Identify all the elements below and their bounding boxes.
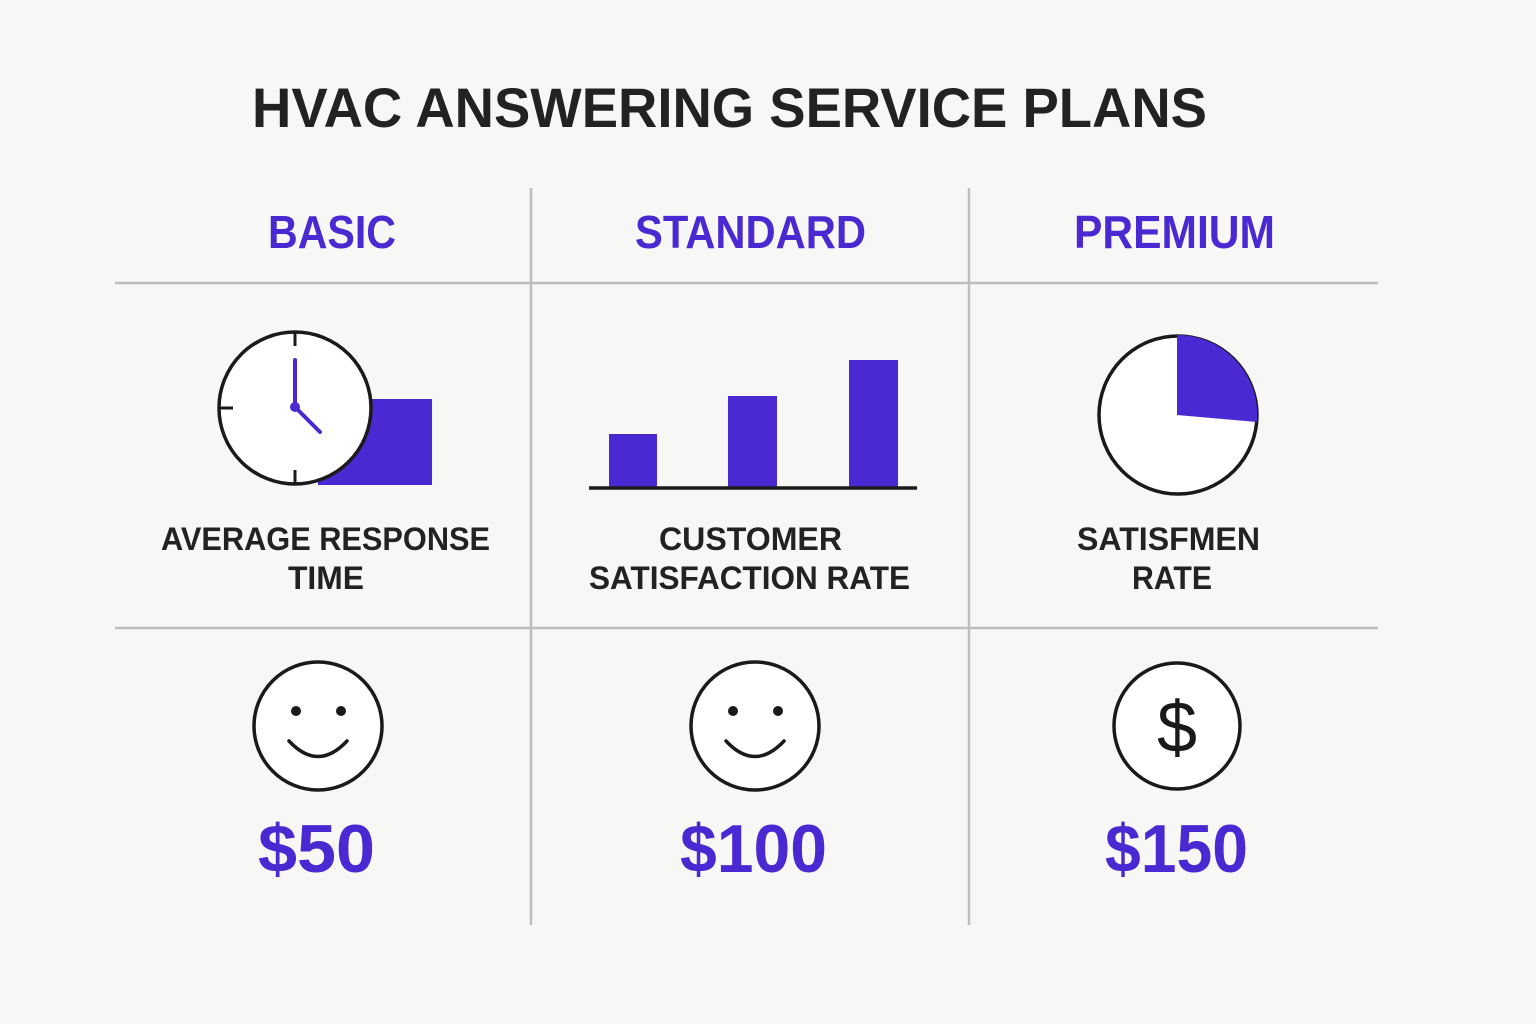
icon: smiley standard [691, 662, 819, 790]
label: customer satisfaction rate: SATISFACTION RATE [589, 560, 910, 596]
icon: pie chart [1099, 335, 1257, 494]
label: average response time: TIME [288, 560, 364, 596]
icon: smiley basic [254, 662, 382, 790]
label: satisfmen rate: SATISFMEN [1077, 521, 1260, 557]
price: $100: $100 [680, 811, 827, 887]
label: satisfmen rate: RATE [1132, 560, 1212, 596]
label: customer satisfaction rate [589, 521, 910, 596]
icon: dollar coin: $ [1157, 688, 1197, 768]
label: average response time: AVERAGE RESPONSE [161, 521, 490, 557]
icon: dollar coin [1114, 663, 1240, 789]
header: standard: STANDARD [635, 206, 866, 258]
price: $50: $50 [258, 811, 375, 887]
title: HVAC ANSWERING SERVICE PLANS [252, 76, 1207, 139]
bar chart [589, 360, 917, 488]
icon: clock with block [219, 332, 432, 485]
label: satisfmen rate [1077, 521, 1260, 596]
header: premium: PREMIUM [1074, 206, 1275, 258]
header: basic: BASIC [268, 206, 396, 258]
label: customer satisfaction rate: CUSTOMER [659, 521, 842, 557]
label: average response time [161, 521, 490, 596]
price: $150: $150 [1105, 811, 1248, 887]
